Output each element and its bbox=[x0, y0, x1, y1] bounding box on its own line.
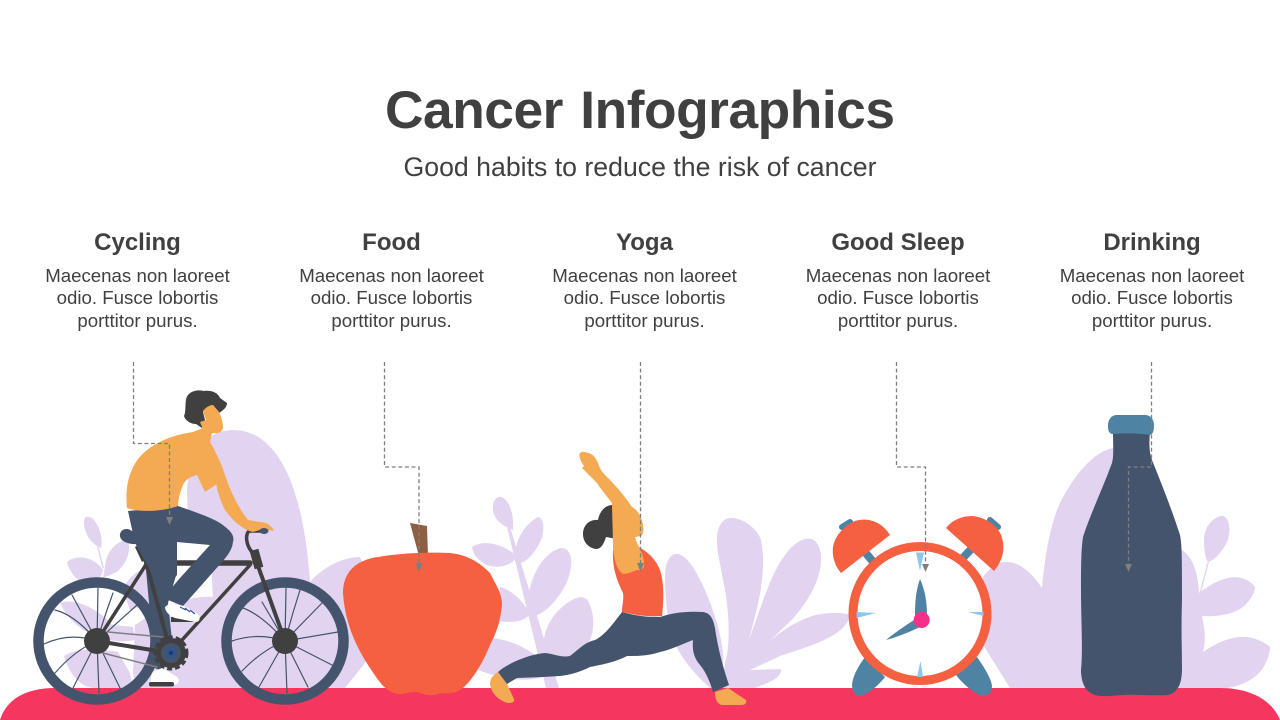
title: Cancer Infographics bbox=[385, 81, 895, 140]
text block: drinking: porttitor purus. bbox=[1092, 310, 1212, 331]
text block: good sleep: odio. Fusce lobortis bbox=[817, 287, 979, 308]
text block: food: Food bbox=[362, 229, 421, 256]
text block: drinking: Drinking bbox=[1103, 229, 1201, 256]
tick marks bbox=[856, 552, 984, 677]
saddle bbox=[120, 529, 146, 544]
text block: good sleep bbox=[806, 229, 991, 331]
front foot bbox=[715, 688, 746, 705]
text block: cycling bbox=[45, 229, 231, 331]
far leg bbox=[133, 512, 177, 672]
text block: food: Maecenas non laoreet bbox=[299, 265, 485, 286]
arrow: good sleep connector bbox=[896, 362, 929, 572]
near leg bbox=[128, 506, 233, 606]
text block: food bbox=[299, 229, 485, 331]
text block: food: odio. Fusce lobortis bbox=[311, 287, 472, 308]
face bbox=[200, 405, 223, 434]
subtitle: Good habits to reduce the risk of cancer bbox=[404, 152, 877, 182]
rear foot bbox=[490, 672, 514, 703]
plant: left foliage behind bicycle bbox=[60, 430, 380, 688]
text block: yoga: Maecenas non laoreet bbox=[552, 265, 738, 286]
text block: yoga bbox=[552, 229, 738, 331]
lower shoe and pedal bbox=[149, 668, 179, 686]
shirt bbox=[126, 428, 226, 511]
text block: drinking: odio. Fusce lobortis bbox=[1071, 287, 1233, 308]
feet bbox=[852, 657, 885, 696]
bicycle frame bbox=[97, 531, 285, 667]
plant: centre foliage behind apple and yoga figure bbox=[472, 497, 593, 688]
stem bbox=[410, 523, 428, 556]
text block: yoga: porttitor purus. bbox=[584, 310, 705, 331]
upper shoe and pedal bbox=[165, 603, 200, 622]
text block: good sleep: Maecenas non laoreet bbox=[806, 265, 991, 286]
tank top bbox=[613, 545, 663, 616]
arrow: drinking connector bbox=[1125, 362, 1152, 572]
text block: cycling: Maecenas non laoreet bbox=[45, 265, 231, 286]
text block: cycling: odio. Fusce lobortis bbox=[57, 287, 218, 308]
text block: drinking: Maecenas non laoreet bbox=[1060, 265, 1245, 286]
chainring bbox=[155, 637, 187, 669]
hand grip bbox=[260, 528, 268, 534]
bell stems and knobs bbox=[864, 544, 976, 564]
bells bbox=[833, 520, 890, 573]
text block: yoga: odio. Fusce lobortis bbox=[564, 287, 725, 308]
hair bbox=[583, 505, 618, 549]
clock hands bbox=[915, 579, 927, 615]
front wheel bbox=[226, 582, 344, 700]
arrow: cycling connector bbox=[134, 362, 173, 525]
clock pivot bbox=[914, 612, 930, 628]
text block: cycling: Cycling bbox=[94, 229, 181, 256]
ground band bbox=[0, 688, 1280, 720]
bottle body bbox=[1081, 432, 1182, 696]
text block: good sleep: Good Sleep bbox=[831, 229, 965, 256]
bottle cap bbox=[1108, 415, 1154, 435]
clock face bbox=[853, 546, 987, 680]
plant: foliage left of clock bbox=[665, 518, 850, 688]
arrow: yoga connector bbox=[637, 362, 644, 572]
icon: alarm clock bbox=[833, 516, 1003, 696]
text block: yoga: Yoga bbox=[616, 229, 674, 256]
arrow: food connector bbox=[384, 362, 422, 572]
text block: cycling: porttitor purus. bbox=[77, 310, 198, 331]
arm bbox=[216, 478, 274, 532]
text block: food: porttitor purus. bbox=[331, 310, 452, 331]
text block: good sleep: porttitor purus. bbox=[838, 310, 958, 331]
arm and torso skin bbox=[579, 452, 644, 574]
text block: drinking bbox=[1060, 229, 1245, 331]
hair bbox=[184, 390, 227, 428]
trousers bbox=[498, 612, 729, 692]
icon: apple bbox=[343, 523, 502, 695]
apple body bbox=[343, 553, 502, 695]
figure: yoga pose bbox=[490, 452, 746, 705]
rear wheel bbox=[38, 582, 156, 700]
figure: cyclist on bicycle bbox=[38, 390, 344, 700]
plant: foliage behind bottle bbox=[982, 448, 1270, 688]
icon: bottle bbox=[1081, 415, 1182, 696]
